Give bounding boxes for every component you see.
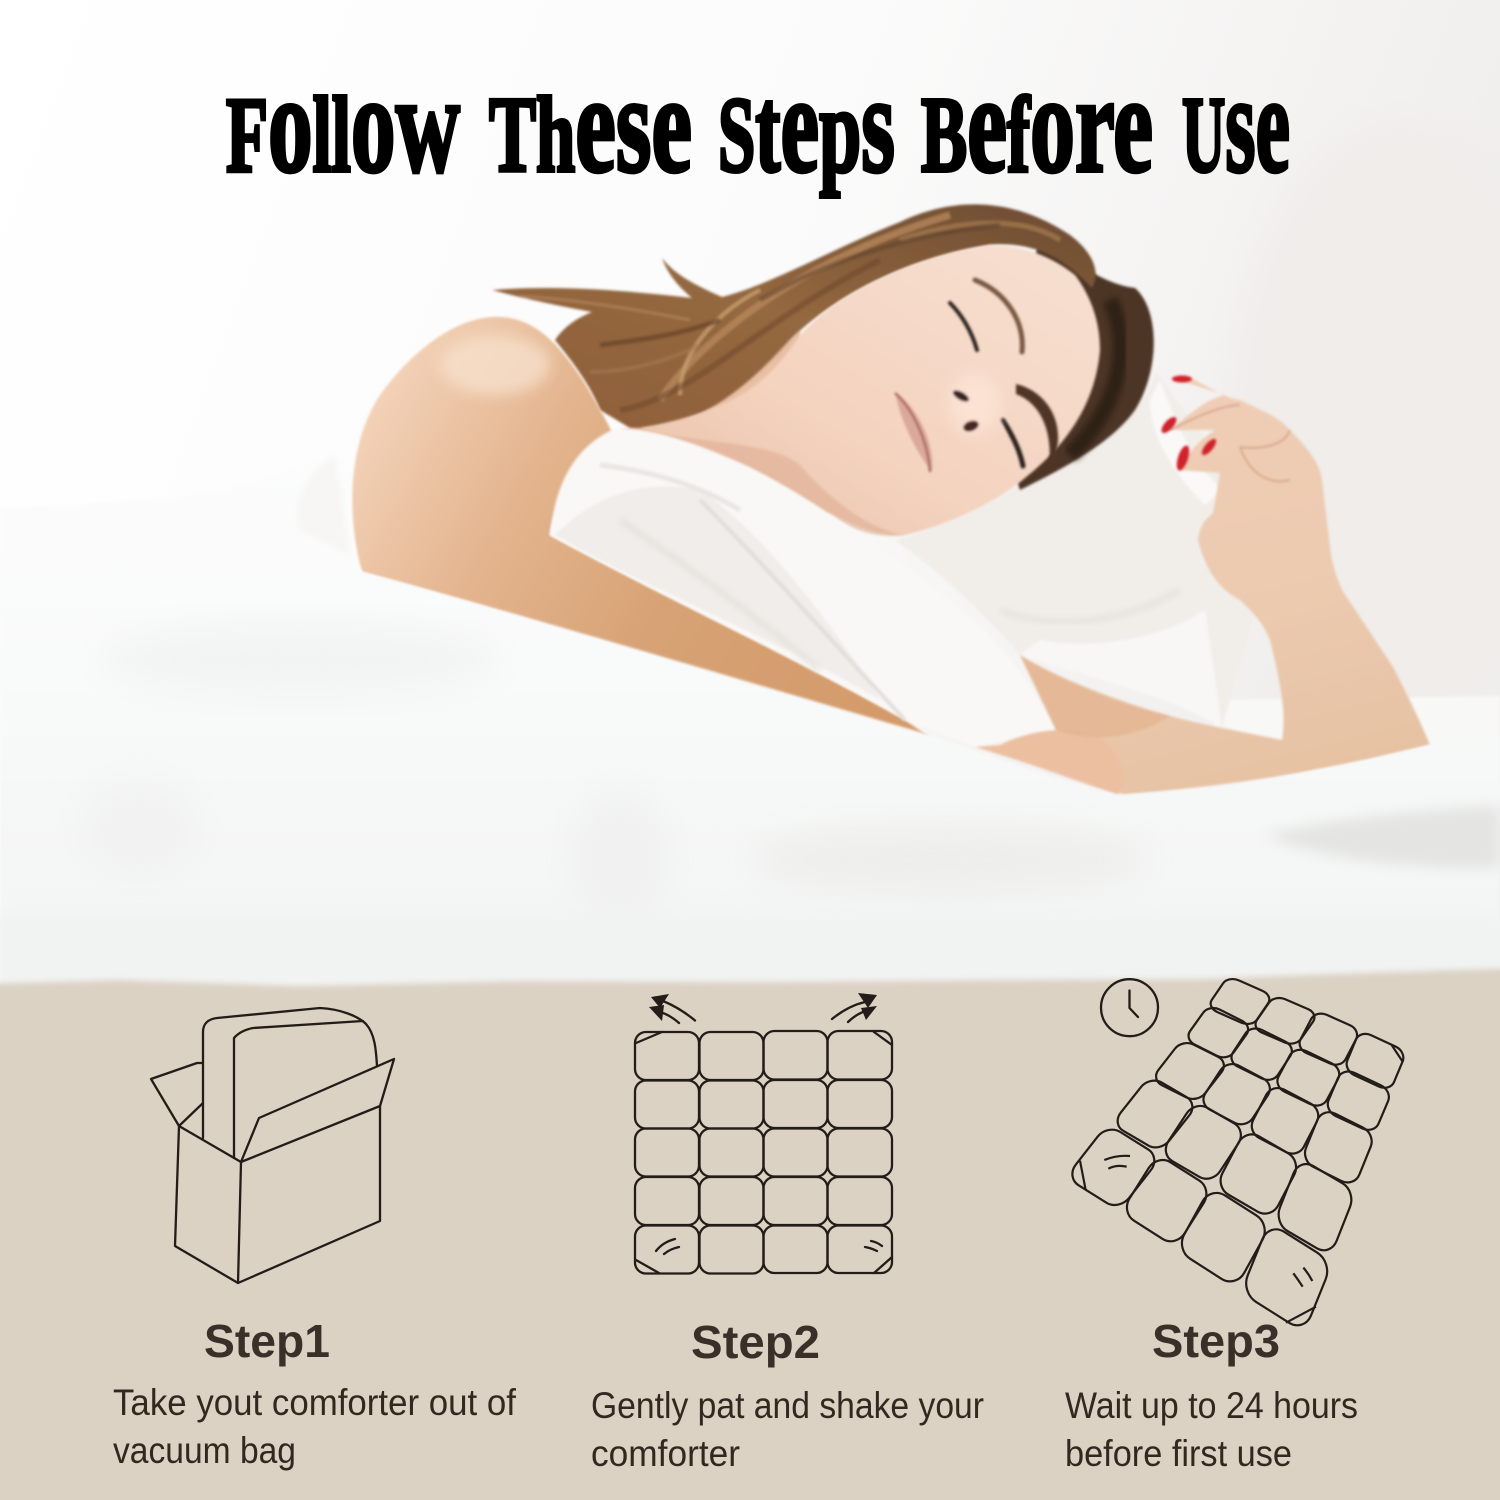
skin beneath hair: neck [620, 330, 830, 520]
step 2 description: Gently pat and shake your [591, 1385, 984, 1426]
facial features [895, 280, 1058, 474]
shoulder and near arm [352, 317, 940, 745]
title: Before [921, 47, 1153, 202]
step 1 description: Take yout comforter out of [113, 1382, 517, 1423]
title: Use [1182, 47, 1290, 202]
front duvet [0, 461, 1500, 990]
title [226, 47, 1290, 202]
step 3 description: before first use [1065, 1433, 1292, 1474]
step 2 description: comforter [591, 1433, 740, 1474]
red nails [1159, 376, 1218, 472]
icon: box with comforter [151, 1008, 394, 1283]
photo: woman sleeping in white bed [0, 0, 1500, 990]
title: Follow [226, 47, 460, 202]
arrows [660, 1001, 868, 1023]
step 3 description: Wait up to 24 hours [1065, 1385, 1358, 1426]
hair behind head [990, 240, 1154, 490]
icon: expanded comforter [1066, 976, 1407, 1332]
icon: clock [1101, 979, 1158, 1036]
blanket wrap [550, 429, 1056, 747]
title: These [489, 47, 692, 202]
step 1 description: vacuum bag [113, 1430, 296, 1471]
step 3 heading: Step3 [1152, 1315, 1280, 1367]
pillow [895, 372, 1255, 728]
step 2 heading: Step2 [691, 1316, 820, 1368]
panel: steps background [0, 968, 1500, 1500]
quilt grid [635, 1031, 892, 1274]
far hand and forearm [975, 378, 1430, 795]
step 1 description [113, 1382, 517, 1471]
step 2 description [591, 1385, 984, 1474]
step 3 description [1065, 1385, 1358, 1474]
step 1 heading: Step1 [204, 1315, 330, 1367]
face and neck [640, 245, 1100, 536]
hair [492, 204, 1096, 428]
duvet shading [0, 455, 1500, 975]
icon: comforter with arrows [635, 993, 892, 1274]
title: Steps [718, 47, 895, 202]
